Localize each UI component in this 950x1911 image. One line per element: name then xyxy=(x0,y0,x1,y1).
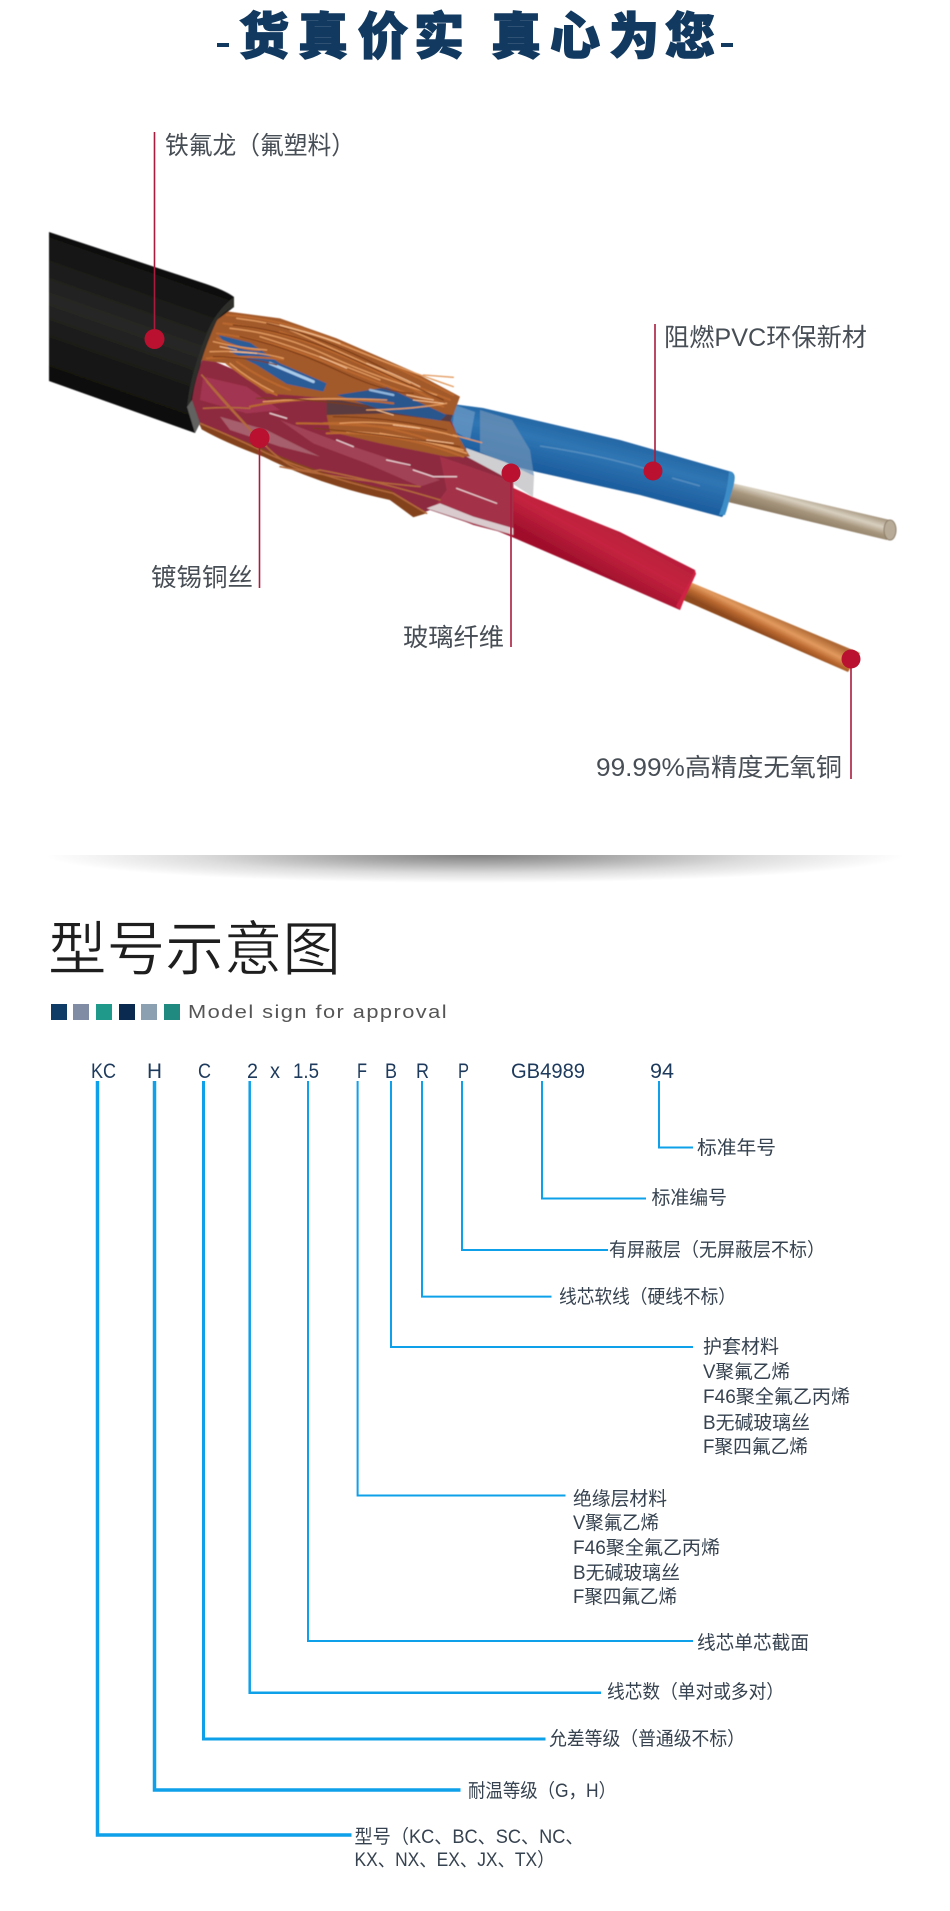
model code: 94 xyxy=(650,1060,674,1083)
upper copper xyxy=(200,310,460,415)
callout: 镀锡铜丝: 镀锡铜丝 xyxy=(151,564,253,592)
connector: 线芯软线 xyxy=(422,1081,736,1308)
callout: 镀锡铜丝 xyxy=(151,428,270,592)
connector: 允差等级 xyxy=(204,1081,745,1750)
connector: 护套材料: 护套材料 xyxy=(703,1336,779,1358)
callout: 铁氟龙: 铁氟龙（氟塑料） xyxy=(165,132,355,160)
copper conductor xyxy=(683,582,860,672)
model code: F xyxy=(357,1060,367,1083)
red body xyxy=(187,357,513,535)
connector: 型号 xyxy=(98,1081,584,1871)
callout: 无氧铜: 99.99%高精度无氧铜 xyxy=(596,754,842,782)
connector: 型号: 型号（KC、BC、SC、NC、 xyxy=(354,1826,584,1848)
dark gap xyxy=(327,397,453,423)
callout: 铁氟龙 xyxy=(144,132,355,349)
connector: 绝缘层材料: 绝缘层材料 xyxy=(573,1488,667,1510)
silver conductor xyxy=(728,483,890,540)
red wire xyxy=(495,484,695,610)
connector: 绝缘层材料: F聚四氟乙烯 xyxy=(573,1586,677,1608)
connector: 线芯软线: 线芯软线（硬线不标） xyxy=(559,1286,736,1308)
connector: 允差等级: 允差等级（普通级不标） xyxy=(549,1728,745,1750)
connector: 绝缘层材料 xyxy=(358,1081,720,1608)
model code: x xyxy=(270,1060,280,1083)
connector: 护套材料 xyxy=(391,1081,850,1458)
exposed blue xyxy=(218,335,327,392)
callout: 玻璃纤维: 玻璃纤维 xyxy=(403,624,504,652)
connector: 标准年号 xyxy=(659,1081,776,1159)
model code: GB4989 xyxy=(511,1060,585,1083)
model code: P xyxy=(458,1060,469,1083)
connector: 有屏蔽层: 有屏蔽层（无屏蔽层不标） xyxy=(609,1239,825,1261)
connector: 线芯数 xyxy=(250,1081,784,1703)
jacket xyxy=(49,232,234,433)
model code xyxy=(91,1060,674,1083)
shadow xyxy=(80,855,870,880)
model code: R xyxy=(416,1060,429,1083)
connector: 有屏蔽层 xyxy=(462,1081,825,1261)
callout: 玻璃纤维 xyxy=(403,464,520,652)
connector: 绝缘层材料: B无碱玻璃丝 xyxy=(573,1562,680,1584)
connector: 护套材料: V聚氟乙烯 xyxy=(703,1361,790,1383)
connector: 绝缘层材料: F46聚全氟乙丙烯 xyxy=(573,1537,720,1559)
connector: 标准编号: 标准编号 xyxy=(652,1187,727,1209)
connector: 耐温等级: 耐温等级（G，H） xyxy=(468,1780,616,1802)
blue wire xyxy=(445,403,735,517)
title: 货真价实真心为您 xyxy=(239,9,715,65)
cable photo xyxy=(49,232,896,672)
model code: 1.5 xyxy=(293,1060,319,1083)
connector: 线芯单芯截面 xyxy=(308,1081,809,1654)
callout: 阻燃PVC xyxy=(644,324,867,480)
colour squares xyxy=(51,1004,180,1020)
connector: 线芯数: 线芯数（单对或多对） xyxy=(607,1681,784,1703)
callout: 阻燃PVC: 阻燃PVC环保新材 xyxy=(664,324,867,352)
connector: 绝缘层材料: V聚氟乙烯 xyxy=(573,1512,659,1534)
connector: 护套材料: F聚四氟乙烯 xyxy=(703,1436,808,1458)
model code: H xyxy=(147,1060,162,1083)
strands mid xyxy=(207,315,467,457)
connector: 标准编号 xyxy=(542,1081,727,1209)
model code: C xyxy=(198,1060,211,1083)
connector: 型号: KX、NX、EX、JX、TX） xyxy=(354,1849,554,1871)
model code: KC xyxy=(91,1060,116,1083)
subtitle: Model sign for approval xyxy=(188,1002,448,1022)
connector: 护套材料: F46聚全氟乙丙烯 xyxy=(703,1386,850,1408)
heading: 型号示意图 xyxy=(48,917,341,983)
model code: B xyxy=(385,1060,397,1083)
clear tape patch xyxy=(466,448,534,497)
callout: 无氧铜 xyxy=(596,650,860,782)
connector: 线芯单芯截面: 线芯单芯截面 xyxy=(697,1632,809,1654)
connector: 耐温等级 xyxy=(154,1081,616,1802)
braided section xyxy=(187,310,513,535)
connector: 标准年号: 标准年号 xyxy=(697,1137,776,1159)
lower wrap xyxy=(198,422,427,517)
model code: 2 xyxy=(247,1060,258,1083)
connector: 护套材料: B无碱玻璃丝 xyxy=(703,1412,810,1434)
lower copper xyxy=(327,413,470,457)
